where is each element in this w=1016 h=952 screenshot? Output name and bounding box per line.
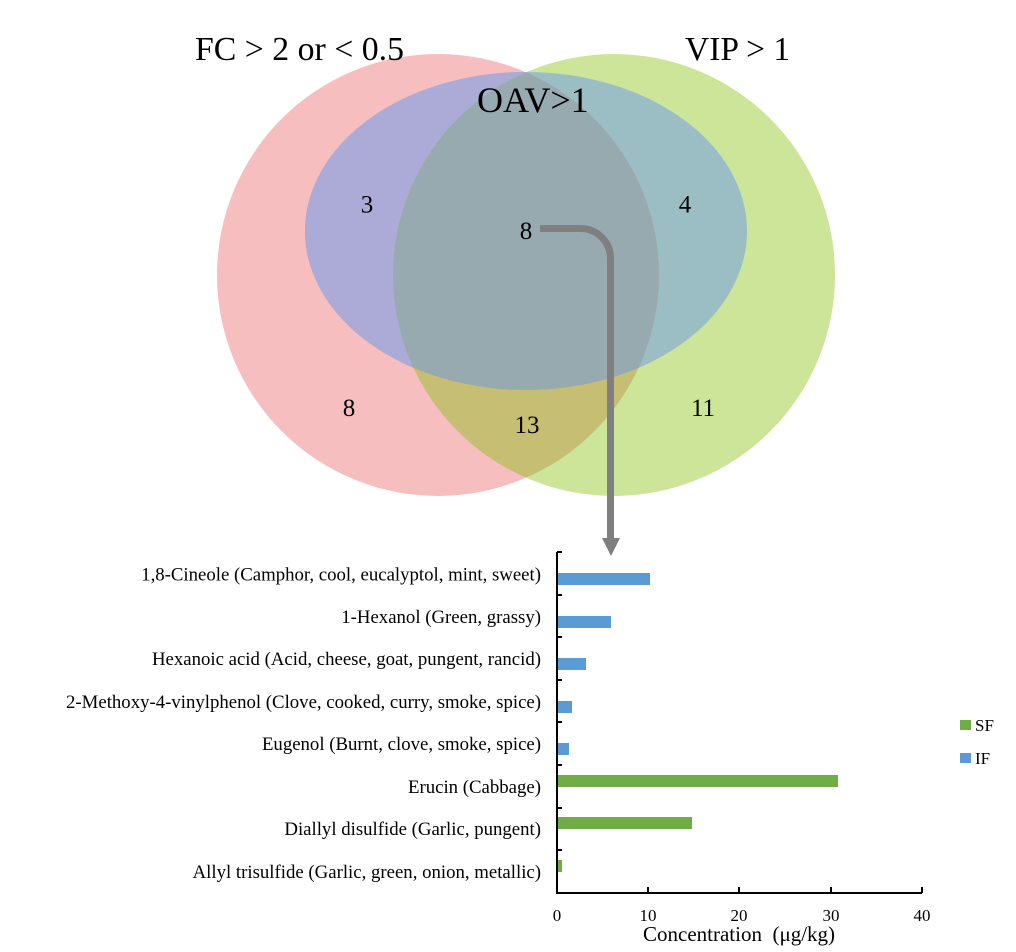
venn counts: 8	[343, 395, 355, 422]
category labels: 1,8-Cineole (Camphor, cool, eucalyptol, mint, sweet)	[141, 564, 541, 586]
venn counts	[343, 192, 715, 439]
venn counts: 13	[514, 412, 540, 439]
circle: FC	[217, 54, 659, 496]
bar chart	[66, 552, 930, 946]
region: all three overlap	[393, 72, 659, 390]
x axis tick labels	[553, 906, 930, 925]
legend: SF: SF	[975, 716, 994, 735]
x axis tick labels: 30	[822, 906, 840, 925]
bars: IF	[557, 573, 650, 755]
category labels: Erucin (Cabbage)	[408, 777, 541, 798]
x axis tick labels: 0	[553, 906, 561, 925]
region: FC and OAV overlap	[305, 72, 526, 368]
legend	[960, 716, 994, 768]
x axis title: Concentration (μg/kg)	[643, 922, 835, 946]
heading: OAV: OAV>1	[477, 80, 589, 120]
category labels	[66, 564, 541, 883]
axes	[557, 552, 922, 893]
x axis tick labels: 20	[730, 906, 748, 925]
category labels: 1-Hexanol (Green, grassy)	[341, 607, 541, 628]
venn counts: 4	[679, 192, 692, 218]
venn counts: 3	[361, 192, 373, 218]
region: FC and VIP overlap	[393, 72, 659, 478]
category labels: Eugenol (Burnt, clove, smoke, spice)	[262, 734, 541, 755]
legend: IF: IF	[975, 749, 990, 768]
category labels: Diallyl disulfide (Garlic, pungent)	[284, 819, 541, 840]
heading: FC: FC > 2 or < 0.5	[195, 31, 404, 68]
venn counts: 11	[691, 395, 715, 422]
arrow: from 8 to chart	[540, 228, 620, 556]
venn diagram	[217, 54, 835, 496]
x axis tick labels: 10	[640, 906, 656, 925]
category labels: Hexanoic acid (Acid, cheese, goat, pungent, rancid)	[152, 649, 541, 670]
x axis tick labels: 40	[914, 906, 930, 925]
category labels: Allyl trisulfide (Garlic, green, onion, metallic)	[193, 862, 541, 883]
venn counts: 8	[520, 218, 532, 245]
heading: VIP: VIP > 1	[685, 31, 790, 68]
bars: SF	[557, 775, 838, 872]
ellipse: OAV and VIP overlap	[305, 72, 747, 390]
category labels: 2-Methoxy-4-vinylphenol (Clove, cooked, curry, smoke, spice)	[66, 692, 541, 713]
circle: VIP	[393, 54, 835, 496]
